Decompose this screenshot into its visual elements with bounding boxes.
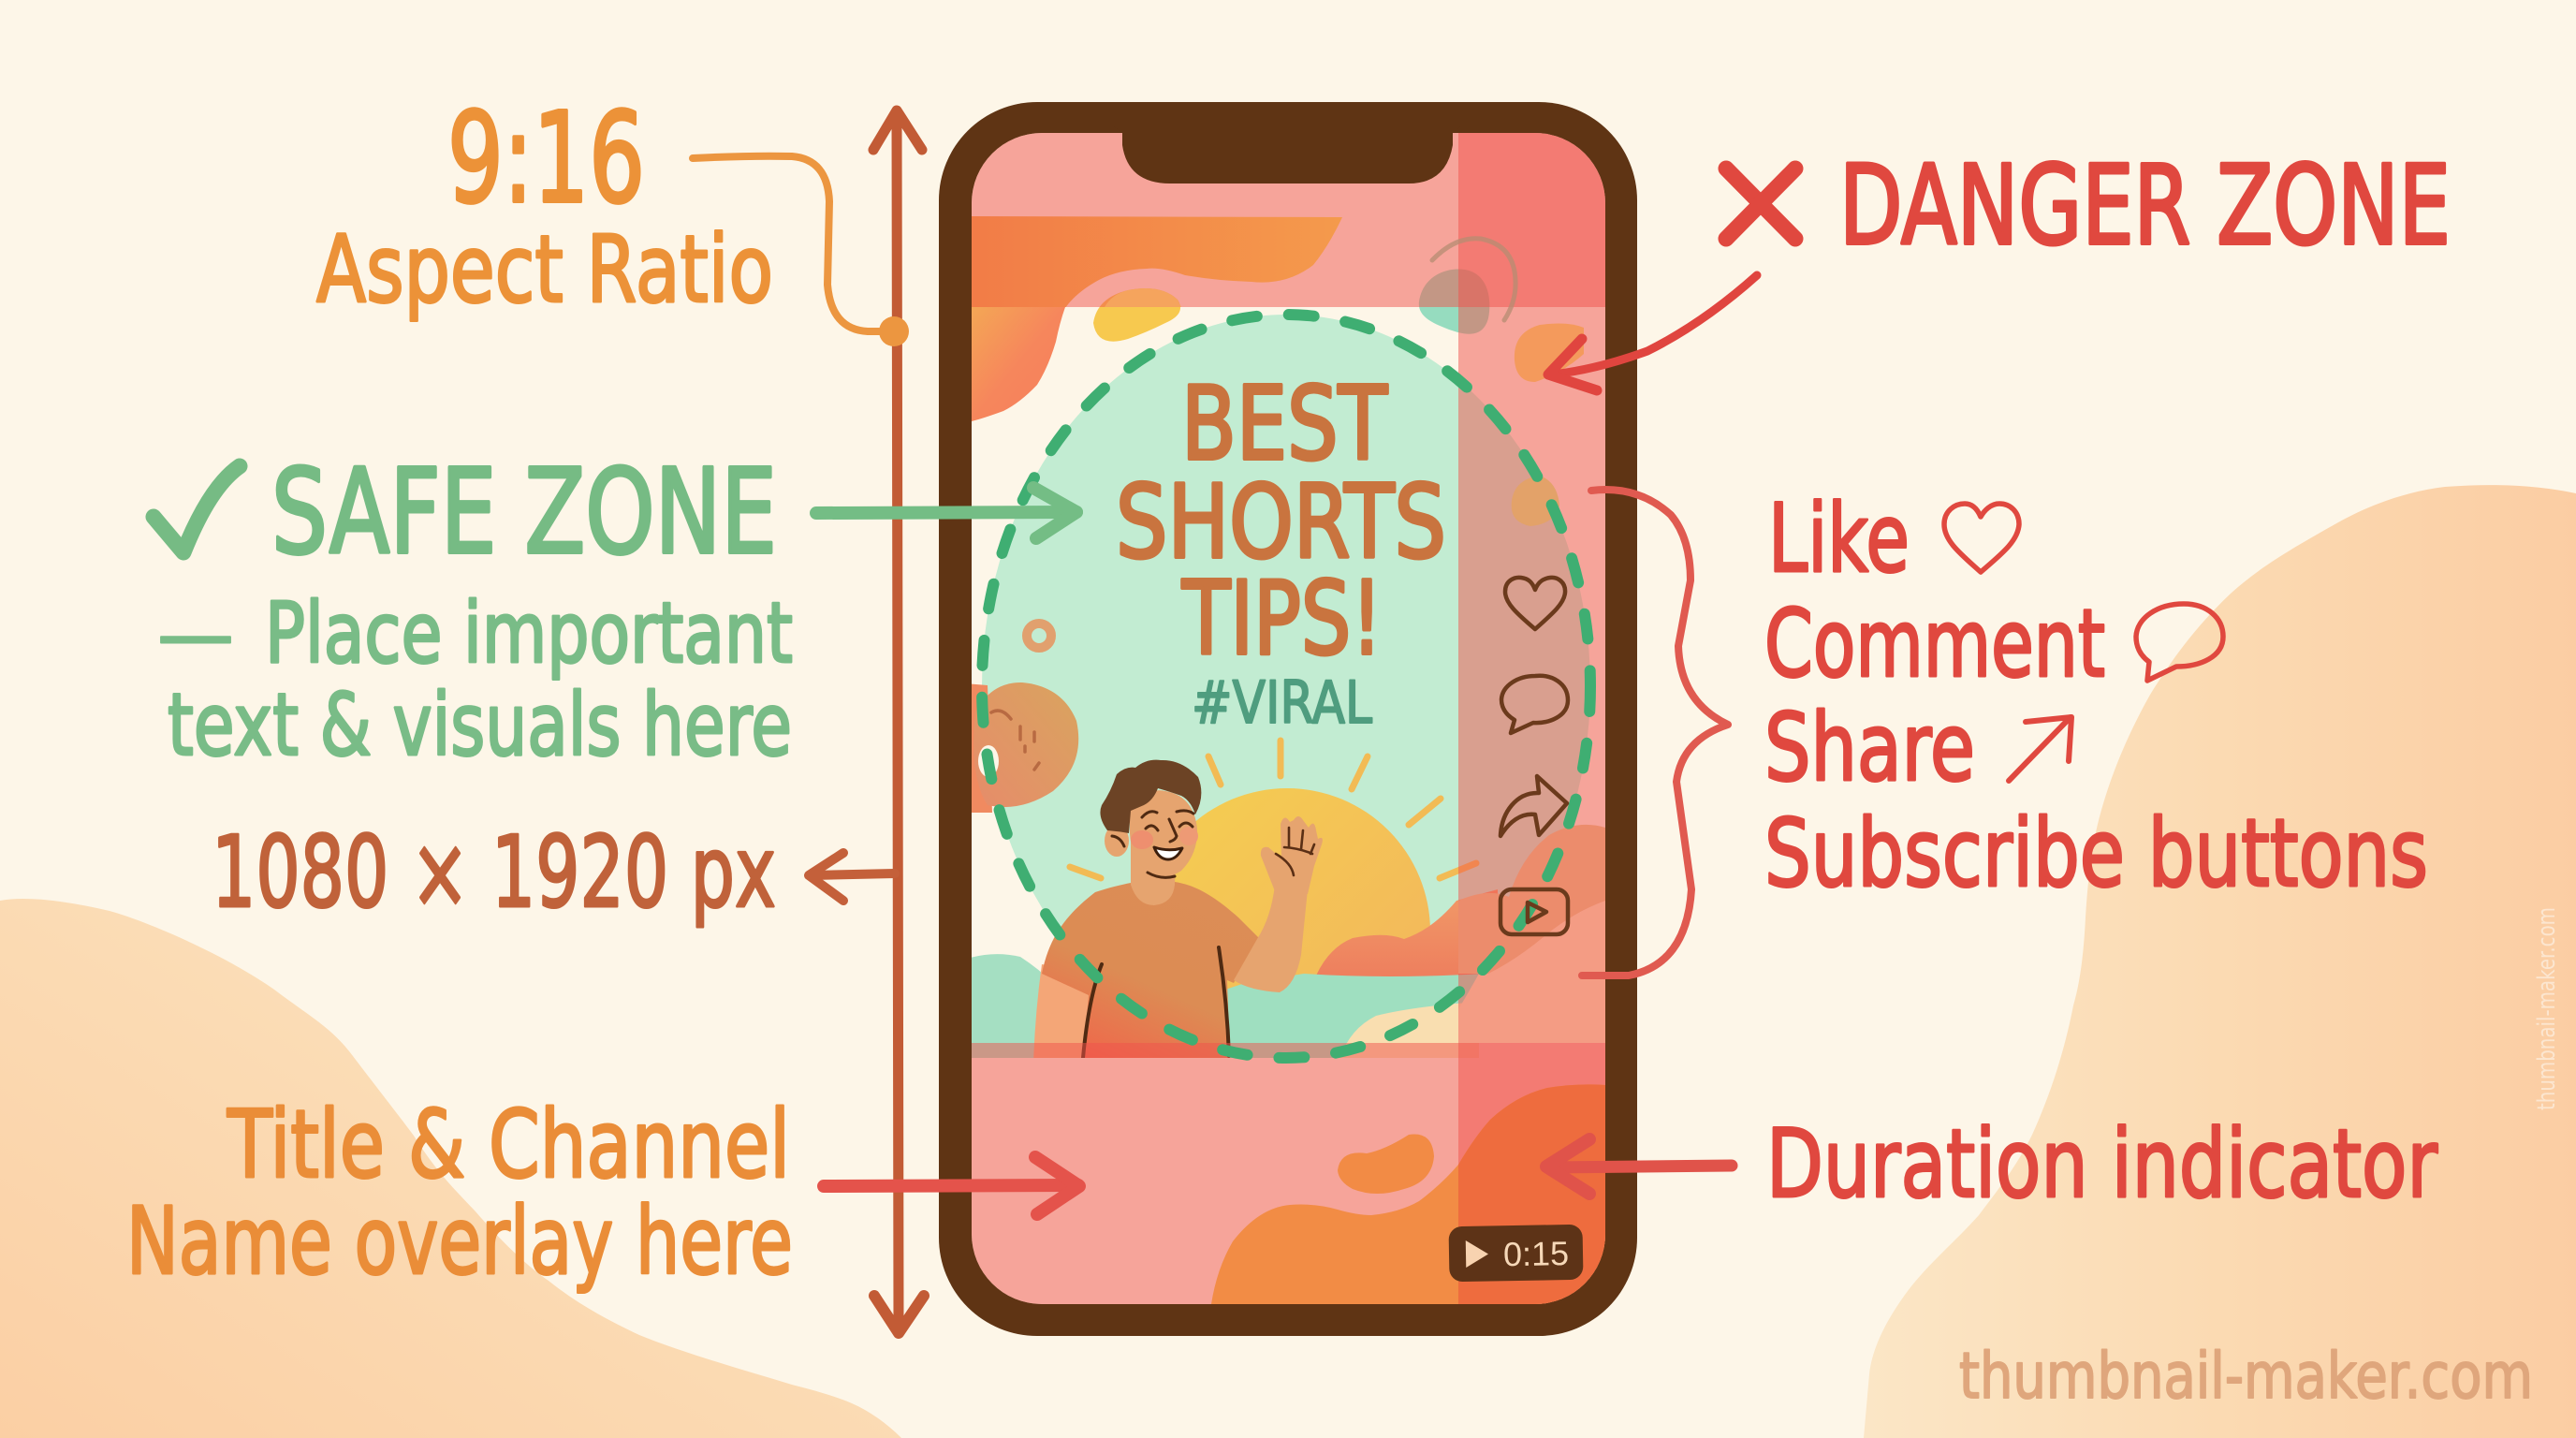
safe zone arrow xyxy=(816,488,1076,538)
thumbnail title xyxy=(1116,366,1446,678)
title overlay label line two: Name overlay here xyxy=(126,1188,793,1296)
phone screen xyxy=(964,133,1605,1304)
icon: comment bubble xyxy=(1501,676,1568,733)
neck xyxy=(1131,838,1176,905)
duration arrow xyxy=(1546,1139,1732,1194)
bottom band overlay xyxy=(972,1043,1605,1304)
small ring xyxy=(1027,624,1051,648)
vertical watermark: thumbnail-maker.com xyxy=(2533,907,2561,1110)
icon: heart xyxy=(1505,578,1565,629)
face xyxy=(1130,790,1197,876)
buttons brace xyxy=(1582,490,1728,976)
like label: Like xyxy=(1768,483,1910,594)
hair xyxy=(1100,760,1201,833)
yellow blob upper tint xyxy=(1105,288,1181,307)
dimensions text: 1080 × 1920 px xyxy=(212,815,776,930)
phone frame xyxy=(939,102,1637,1336)
bottom large orange blob xyxy=(1211,1084,1605,1304)
vertical height arrow xyxy=(873,110,924,1333)
aspect caption: Aspect Ratio xyxy=(316,216,773,324)
danger column overlay xyxy=(1458,133,1605,1165)
shirt fold lines xyxy=(1083,947,1229,1058)
title overlay label line one: Title & Channel xyxy=(227,1090,790,1199)
hashtag: #VIRAL xyxy=(1192,668,1372,737)
face blob marks xyxy=(991,711,1039,770)
mint strip xyxy=(1227,974,1479,1058)
icon: comment bubble label xyxy=(2136,604,2223,681)
cheeks xyxy=(1131,830,1153,849)
icon: check mark xyxy=(154,466,240,552)
icon: share arrow xyxy=(1500,776,1567,836)
icon: share arrow label xyxy=(2009,717,2071,781)
orange accent blob xyxy=(1515,324,1584,382)
safe zone note line one: Place important xyxy=(265,584,793,682)
left arm xyxy=(1033,964,1089,1058)
title line TIPS: TIPS! xyxy=(1181,561,1383,678)
bottom bean blob xyxy=(1338,1134,1434,1194)
title line SHORTS: SHORTS xyxy=(1116,464,1446,581)
sun xyxy=(1175,788,1430,989)
connector dot xyxy=(879,316,909,346)
sun rays xyxy=(1070,741,1476,878)
column hill xyxy=(1458,825,1605,974)
coral blob behind face blob xyxy=(972,683,992,813)
illustration xyxy=(964,741,1498,1075)
lower part of orange blob xyxy=(972,307,1065,421)
danger zone arrow xyxy=(1548,275,1757,390)
icon: danger cross xyxy=(1726,169,1795,239)
facial features xyxy=(1112,811,1193,877)
smile xyxy=(1154,847,1182,859)
mint accent blob top right xyxy=(1419,269,1489,334)
orange accent blob lower xyxy=(1512,476,1559,526)
share label: Share xyxy=(1764,693,1975,802)
coral hills xyxy=(1316,889,1498,976)
play triangle xyxy=(1466,1240,1488,1268)
column salmon base xyxy=(1458,899,1605,1043)
icon: like heart xyxy=(1944,504,2019,572)
top band overlay xyxy=(972,133,1605,307)
face blob left xyxy=(973,682,1078,807)
waving arm xyxy=(1234,885,1308,992)
top-left orange blob xyxy=(972,216,1342,307)
aspect ratio connector xyxy=(693,156,909,346)
palm lines xyxy=(1276,828,1314,875)
safe zone dash: — xyxy=(157,585,234,682)
background blob: bottom left xyxy=(0,899,901,1438)
safe zone fill xyxy=(982,315,1589,927)
left mint hill xyxy=(972,954,1041,1058)
cream gap in face blob xyxy=(978,745,999,777)
duration text: 0:15 xyxy=(1503,1234,1569,1273)
safe zone heading: SAFE ZONE xyxy=(271,445,777,580)
safe zone note line two: text & visuals here xyxy=(168,675,792,775)
ear xyxy=(1105,830,1129,857)
title line BEST: BEST xyxy=(1181,366,1388,483)
duration pill xyxy=(1449,1225,1584,1282)
aspect value: 9:16 xyxy=(447,87,645,231)
safe zone dashed outline xyxy=(982,315,1590,1058)
icon: subscribe button xyxy=(1500,889,1568,934)
comment label: Comment xyxy=(1764,589,2105,698)
hand xyxy=(1261,816,1323,894)
yellow blob xyxy=(1093,288,1180,342)
danger tint on orange blob xyxy=(1458,1084,1605,1304)
dimensions arrow xyxy=(809,853,895,901)
title overlay arrow xyxy=(824,1157,1079,1214)
cream shore xyxy=(1340,1004,1479,1058)
phone mockup xyxy=(939,102,1637,1336)
background blob: bottom right xyxy=(1864,485,2576,1438)
notch xyxy=(1114,126,1460,183)
shirt xyxy=(1042,882,1259,1060)
arc accent xyxy=(1432,239,1515,320)
